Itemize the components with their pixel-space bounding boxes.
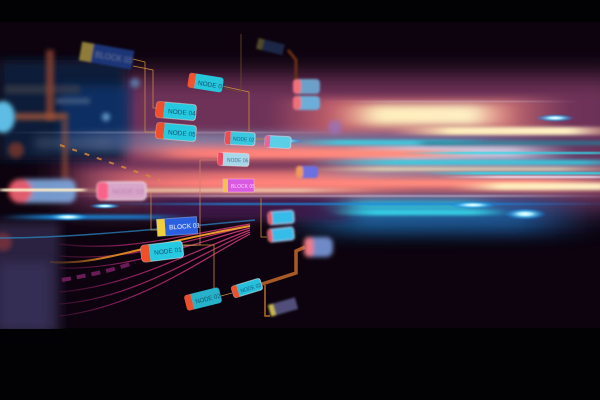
node: NODE 03 lower — [231, 278, 263, 298]
node: BLOCK 01: BLOCK 01 — [169, 222, 201, 232]
node: small node right of NODE 02 — [265, 135, 291, 149]
node: blurred node upper right, bottom — [293, 96, 320, 110]
node: NODE 06: NODE 06 — [227, 158, 249, 165]
node: right pair lower — [267, 227, 295, 242]
node: NODE 03 (blurred) — [97, 182, 146, 200]
node: BLOCK 01 — [156, 216, 201, 236]
node: NODE 05: NODE 05 — [168, 129, 196, 139]
node: blurred node lower right — [304, 237, 333, 257]
medium streaks — [0, 127, 600, 219]
node: NODE 05 — [155, 122, 197, 142]
node: BLOCK 05: BLOCK 05 — [231, 184, 255, 190]
node: top-left block (blurred) — [79, 42, 135, 70]
thin streaks — [0, 101, 600, 205]
glowing lens flares — [46, 114, 575, 221]
light streaks — [0, 98, 600, 219]
node: top block (blurred) — [256, 38, 285, 55]
node: NODE 02 top — [225, 131, 255, 146]
node: NODE 01 lower — [140, 241, 184, 262]
flowing data lines — [0, 145, 255, 316]
node: NODE 02 lower — [184, 287, 223, 311]
node: blurred block lower right — [268, 297, 298, 317]
node: blurred node upper right, top — [293, 79, 320, 94]
node: NODE 01 top — [187, 72, 227, 93]
node: NODE 04: NODE 04 — [168, 108, 196, 118]
connector lines — [133, 34, 305, 316]
left blurred panel: out-of-focus data screen — [0, 50, 140, 341]
node: NODE 02 top: NODE 02 — [233, 137, 255, 144]
node: top-left block (blurred): BLOCK 03 — [94, 50, 134, 66]
node: right pair upper — [268, 210, 294, 225]
node: blurred small node at streak — [296, 166, 318, 178]
node: NODE 01 lower: NODE 01 — [154, 247, 183, 257]
broad soft bands — [60, 98, 600, 211]
node: NODE 03 (blurred): NODE 03 — [112, 187, 144, 196]
node: NODE 03 lower: NODE 03 — [240, 283, 262, 295]
node: NODE 06 — [218, 152, 249, 167]
node: BLOCK 05 — [223, 179, 255, 192]
left blob — [8, 179, 76, 203]
node: NODE 04 — [155, 101, 197, 121]
node: NODE 01 top: NODE 01 — [197, 80, 226, 91]
node: NODE 02 lower: NODE 02 — [195, 294, 222, 306]
